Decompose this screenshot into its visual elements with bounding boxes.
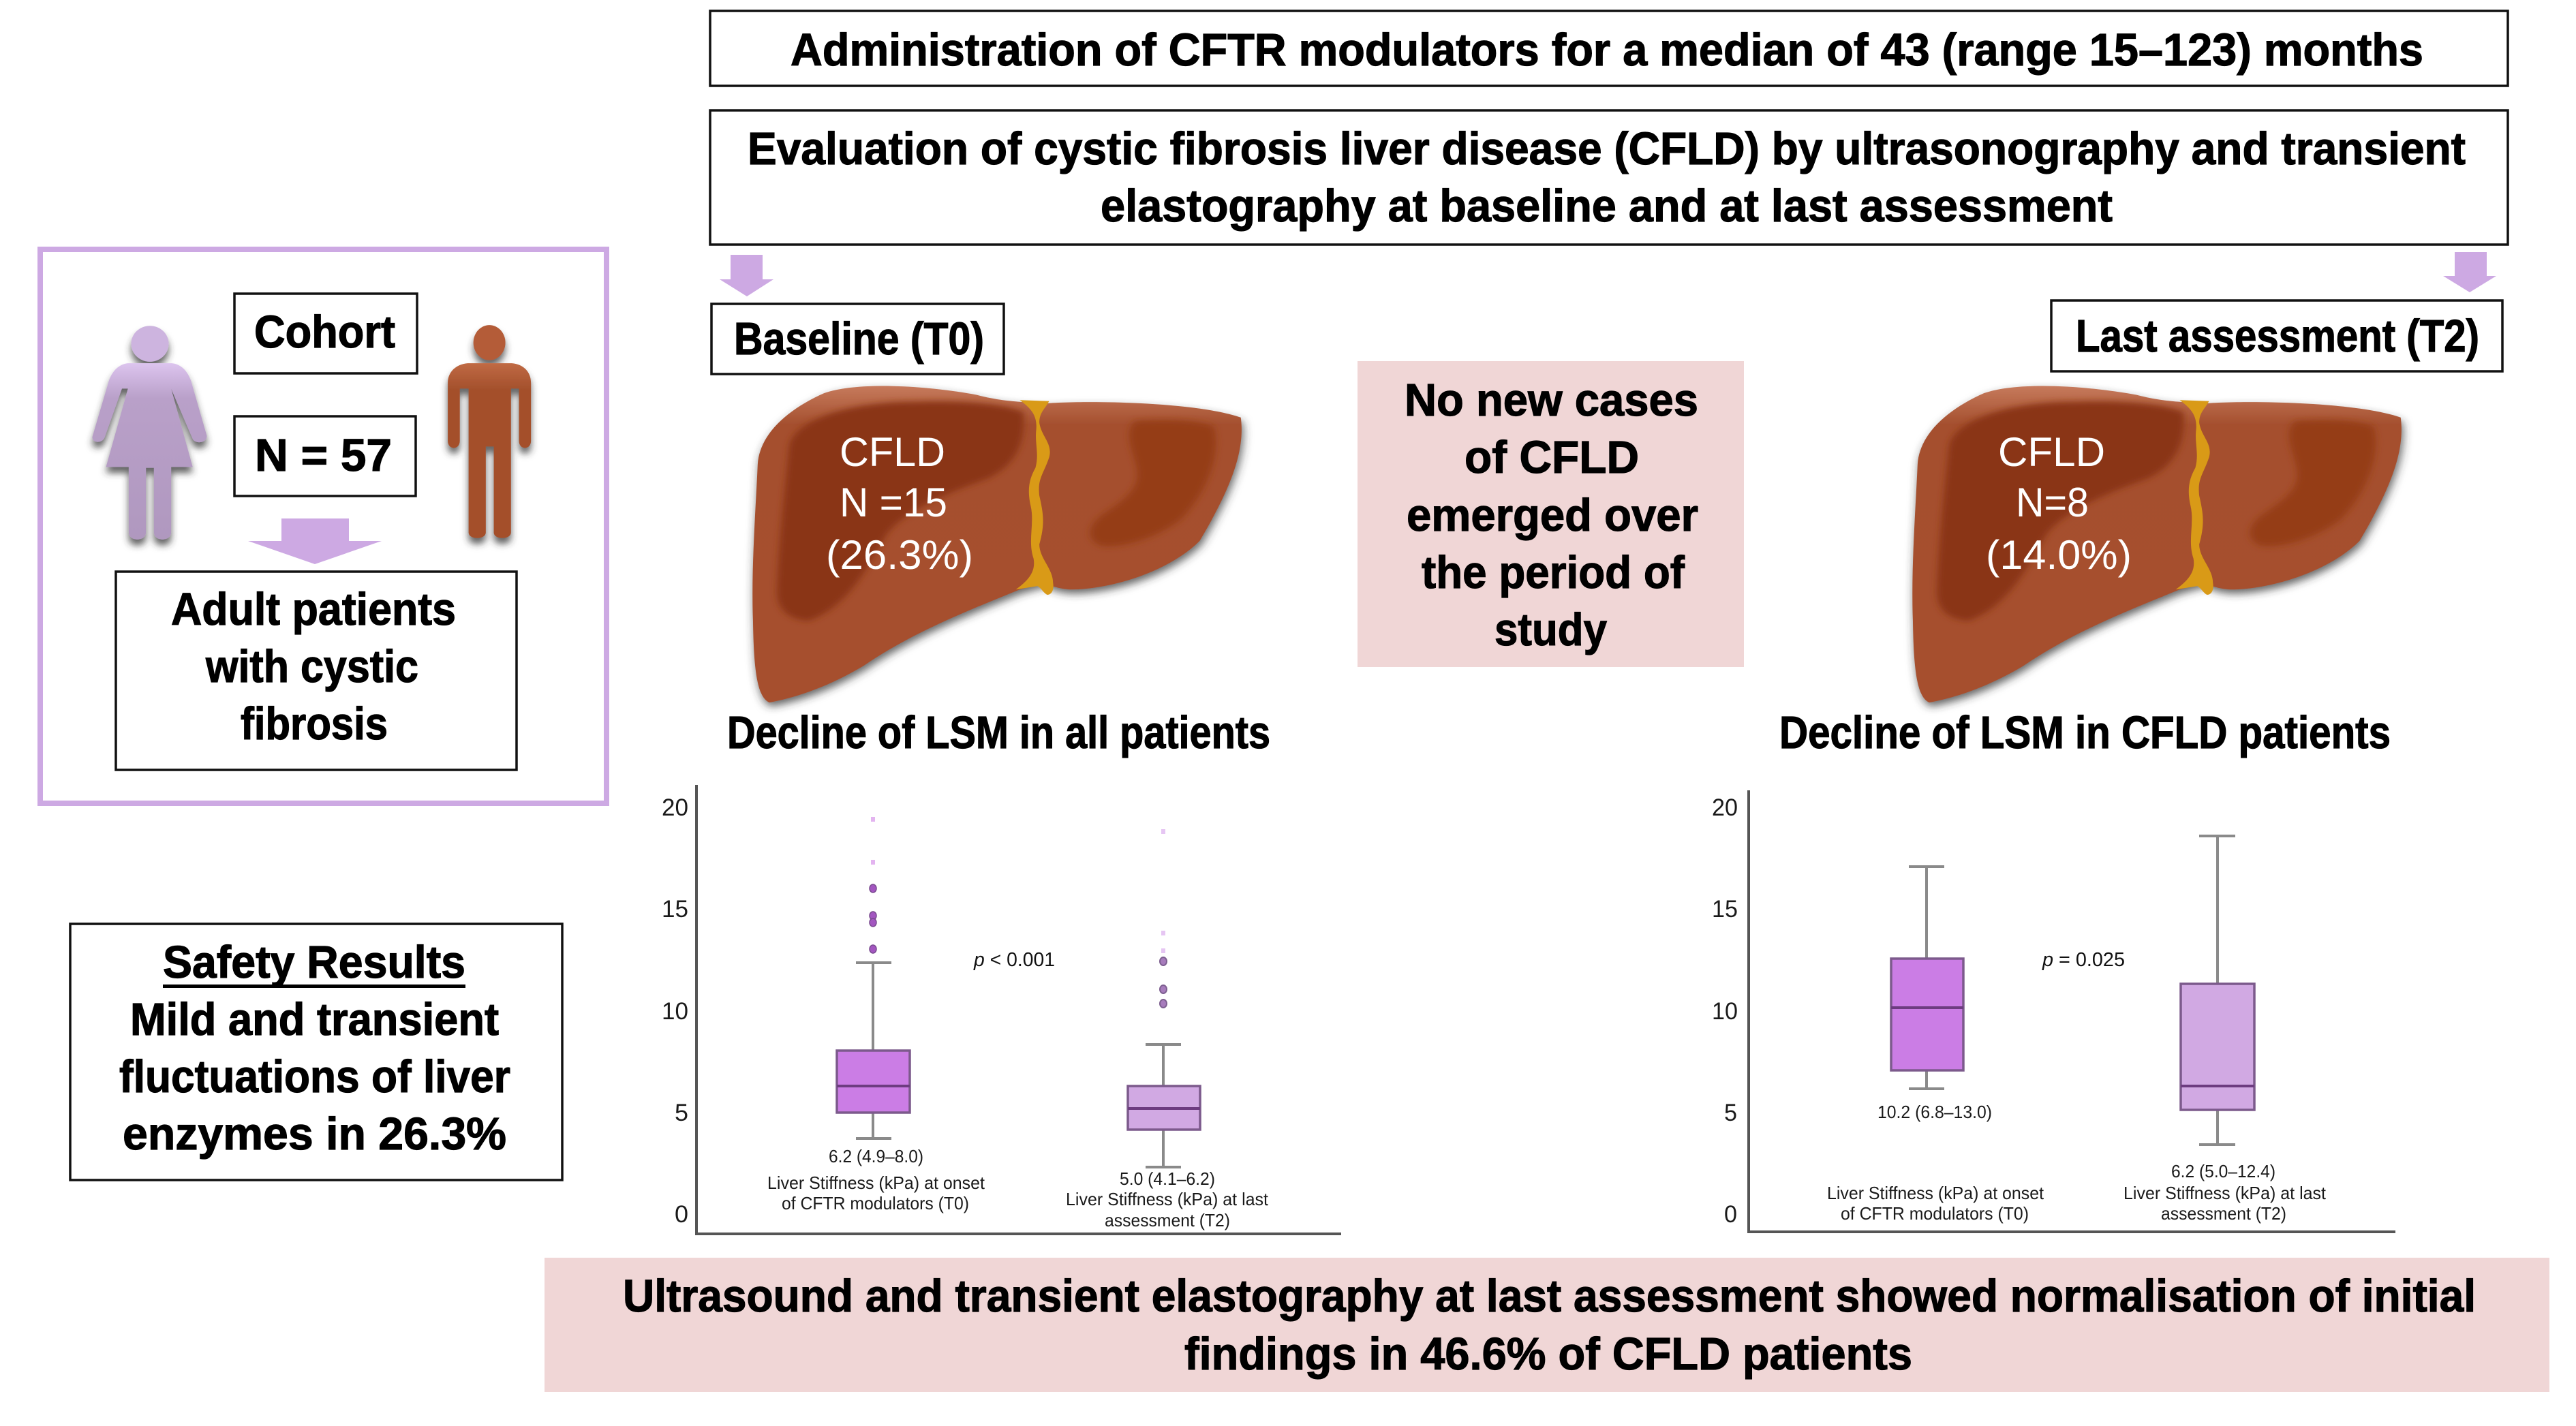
- heading: decline CFLD patients: Decline of LSM in CFLD patients: [1779, 707, 2391, 758]
- axes: [696, 785, 1341, 1234]
- liver label: last assessment: CFLD: [1998, 429, 2105, 475]
- caption: T0: [1827, 1102, 2044, 1224]
- caption: T2: [1066, 1168, 1269, 1230]
- y axis labels: 5: [1724, 1100, 1737, 1126]
- y axis labels: 15: [1712, 896, 1738, 923]
- adult patients box: with cystic: [205, 641, 418, 692]
- liver label: last assessment: (14.0%): [1986, 532, 2132, 578]
- cohort label: Cohort: [254, 307, 395, 358]
- box: T2: [2181, 836, 2254, 1145]
- y axis labels: [1712, 794, 1738, 1228]
- y axis labels: [662, 794, 688, 1228]
- liver: baseline: [752, 386, 1242, 702]
- caption: T2: 6.2 (5.0–12.4): [2171, 1161, 2275, 1181]
- header: evaluation: elastography at baseline and at last assessment: [1101, 181, 2113, 232]
- liver: last assessment: [1912, 386, 2402, 702]
- callout: no new cases: the period of: [1422, 547, 1685, 598]
- liver label: last assessment: [1986, 429, 2132, 578]
- axes: [1749, 790, 2395, 1232]
- panel: cohort: [40, 249, 607, 803]
- callout: no new cases: No new cases: [1405, 375, 1698, 426]
- last assessment label: [2051, 300, 2502, 371]
- safety results box: Mild and transient: [130, 994, 499, 1045]
- caption: T2: assessment (T2): [1105, 1210, 1230, 1230]
- liver label: baseline: (26.3%): [826, 532, 973, 578]
- adult patients box: fibrosis: [241, 698, 388, 749]
- header: administration: [710, 11, 2508, 86]
- y axis labels: 5: [675, 1100, 688, 1126]
- caption: T2: 5.0 (4.1–6.2): [1120, 1168, 1215, 1189]
- callout: no new cases: of CFLD: [1465, 432, 1639, 483]
- icon: man: [448, 325, 531, 538]
- caption: T2: Liver Stiffness (kPa) at last: [2123, 1183, 2327, 1203]
- callout: no new cases: study: [1494, 604, 1607, 655]
- box: T2: [1128, 829, 1200, 1167]
- safety results box: fluctuations of liver: [119, 1051, 510, 1102]
- liver label: baseline: [826, 429, 973, 578]
- cohort label: [234, 294, 417, 373]
- caption: T0: of CFTR modulators (T0): [782, 1193, 969, 1213]
- safety results box: Safety Results: [163, 937, 465, 988]
- caption: T0: Liver Stiffness (kPa) at onset: [1827, 1183, 2044, 1203]
- conclusion band: Ultrasound and transient elastography at last assessment showed normalisation of initial: [623, 1271, 2476, 1322]
- adult patients box: [116, 572, 517, 770]
- caption: T0: [767, 1146, 985, 1213]
- arrow: to last assessment: [2443, 252, 2496, 292]
- liver label: baseline: N =15: [840, 480, 947, 525]
- header: evaluation: Evaluation of cystic fibrosis liver disease (CFLD) by ultrasonography and transient: [748, 123, 2466, 174]
- last assessment label: Last assessment (T2): [2076, 311, 2479, 362]
- y axis labels: 15: [662, 896, 688, 923]
- baseline label: Baseline (T0): [734, 313, 984, 365]
- caption: T2: assessment (T2): [2161, 1203, 2286, 1224]
- y axis labels: 20: [662, 794, 688, 821]
- callout: no new cases: [1358, 361, 1744, 667]
- box: T0: [1891, 867, 1963, 1089]
- callout: no new cases: emerged over: [1407, 490, 1698, 541]
- cohort size: N = 57: [255, 430, 392, 481]
- caption: T2: [2123, 1161, 2327, 1224]
- heading: decline all patients: Decline of LSM in all patients: [727, 707, 1270, 758]
- p value: p = 0.025: [2042, 949, 2125, 971]
- icon: woman: [92, 326, 206, 540]
- safety results box: enzymes in 26.3%: [123, 1109, 506, 1160]
- caption: T0: of CFTR modulators (T0): [1841, 1203, 2029, 1224]
- box plot: all patients: [662, 785, 1341, 1234]
- adult patients box: Adult patients: [171, 584, 456, 635]
- box plot: CFLD patients: [1712, 790, 2395, 1232]
- header: administration: Administration of CFTR modulators for a median of 43 (range 15–123) months: [791, 25, 2423, 76]
- arrow: to baseline: [720, 255, 773, 296]
- baseline label: [711, 304, 1004, 374]
- caption: T0: 10.2 (6.8–13.0): [1877, 1102, 1992, 1122]
- liver label: last assessment: N=8: [2016, 480, 2089, 525]
- liver label: baseline: CFLD: [840, 429, 945, 475]
- arrow: cohort down: [248, 518, 382, 564]
- caption: T2: Liver Stiffness (kPa) at last: [1066, 1189, 1269, 1209]
- conclusion band: [545, 1258, 2549, 1392]
- y axis labels: 10: [1712, 998, 1738, 1025]
- safety results box: [70, 924, 562, 1180]
- box: T0: [837, 817, 910, 1138]
- y axis labels: 0: [1724, 1201, 1737, 1228]
- cohort size: [234, 416, 416, 496]
- conclusion band: findings in 46.6% of CFLD patients: [1184, 1329, 1912, 1380]
- caption: T0: Liver Stiffness (kPa) at onset: [767, 1173, 985, 1193]
- caption: T0: 6.2 (4.9–8.0): [829, 1146, 923, 1166]
- y axis labels: 0: [675, 1201, 688, 1228]
- y axis labels: 10: [662, 998, 688, 1025]
- header: evaluation: [710, 110, 2508, 245]
- p value: p < 0.001: [973, 949, 1055, 971]
- y axis labels: 20: [1712, 794, 1738, 821]
